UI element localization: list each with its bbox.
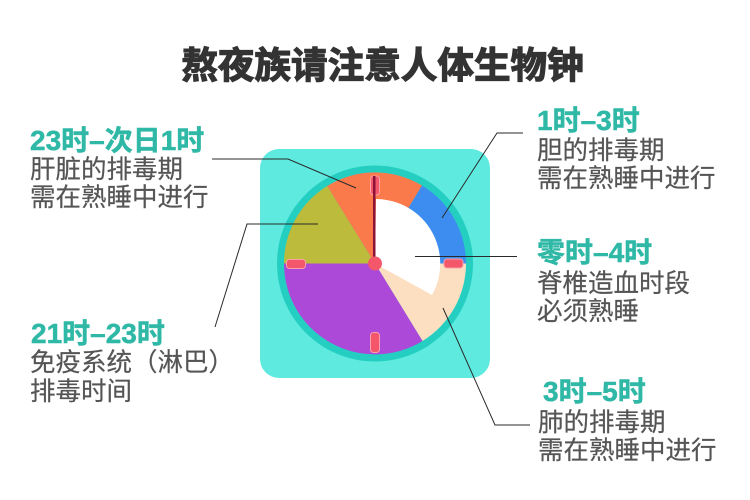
label: 23-1: 肝脏的排毒期 [30, 156, 183, 184]
label: 21-23: 免疫系统（淋巴） [30, 349, 234, 377]
label: zero-4: 必须熟睡 [537, 298, 639, 326]
clock background [260, 149, 490, 378]
label: 1-3: 需在熟睡中进行 [537, 165, 716, 193]
leader line: 3-5 [443, 308, 530, 425]
tick 6 [370, 332, 380, 352]
sector: 3-5 cream [375, 264, 466, 341]
label: 21-23: 排毒时间 [30, 378, 132, 406]
label: zero-4 [537, 237, 690, 326]
label: 23-1: 需在熟睡中进行 [30, 184, 209, 212]
label: 23-1 [30, 125, 209, 212]
label: 23-1: 23时–次日1时 [30, 125, 204, 156]
label: 1-3: 胆的排毒期 [537, 137, 665, 165]
label: 3-5: 肺的排毒期 [538, 409, 666, 437]
leader line: 1-3 [442, 133, 523, 218]
tick 12 [370, 176, 380, 195]
label: 3-5: 需在熟睡中进行 [538, 437, 717, 465]
tick 9 [286, 260, 306, 268]
label: 21-23 [30, 318, 234, 406]
sector: 1-3 blue [375, 186, 466, 264]
label: 1-3: 1时–3时 [537, 105, 640, 136]
label: 3-5: 3时–5时 [543, 376, 646, 407]
title: 熬夜族请注意人体生物钟 [181, 45, 584, 86]
label: 1-3 [537, 105, 716, 193]
leader line: zero-4 [415, 256, 517, 258]
label: zero-4: 零时–4时 [537, 237, 652, 268]
clock center [368, 256, 382, 270]
sector: 23-1 orange [327, 172, 422, 264]
label: 21-23: 21时–23时 [31, 318, 165, 349]
clock hand [373, 176, 376, 263]
leader line: 21-23 [215, 224, 318, 327]
label: 3-5 [538, 376, 717, 465]
leader line: 23-1 [212, 159, 356, 188]
sector: immune purple [284, 264, 422, 354]
label: zero-4: 脊椎造血时段 [537, 270, 690, 298]
tick 3 [444, 259, 463, 268]
sector: 21-23 olive [284, 186, 375, 264]
clock ring [277, 166, 473, 362]
sector: zero to 4 white [375, 199, 440, 295]
clock icon panel [260, 149, 490, 378]
